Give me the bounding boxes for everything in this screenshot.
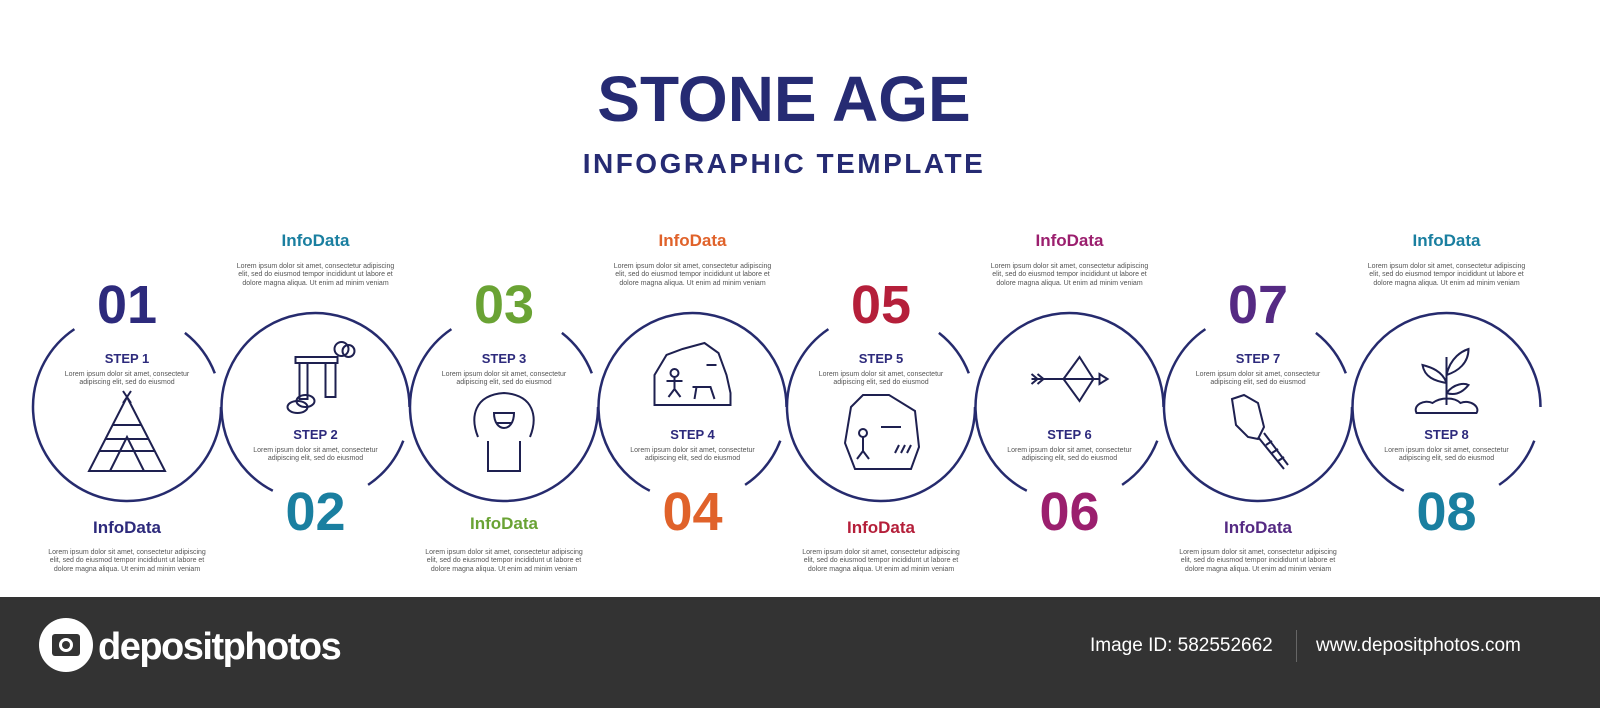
step 4: elit, sed do eiusmod tempor incididunt ut labore et — [615, 271, 770, 278]
icon: stonehenge — [288, 342, 354, 413]
step 7 — [1164, 275, 1352, 573]
step 8: STEP 8 — [1424, 427, 1469, 442]
step 1: 01 — [97, 275, 157, 335]
step 4 — [598, 231, 786, 542]
step 1: elit, sed do eiusmod tempor incididunt ut labore et — [50, 557, 204, 564]
step 2: InfoData — [282, 231, 350, 250]
step 1: dolore magna aliqua. Ut enim ad minim veniam — [54, 566, 200, 573]
step 4: adipiscing elit, sed do eiusmod — [645, 455, 740, 462]
step 3: elit, sed do eiusmod tempor incididunt ut labore et — [427, 557, 581, 564]
step 7: elit, sed do eiusmod tempor incididunt ut labore et — [1181, 557, 1335, 564]
icon: stone club — [1232, 395, 1288, 469]
step 1: Lorem ipsum dolor sit amet, consectetur — [65, 371, 190, 378]
step 7: InfoData — [1224, 518, 1293, 537]
step 1: STEP 1 — [105, 351, 149, 366]
step 7: STEP 7 — [1236, 351, 1280, 366]
step 8: Lorem ipsum dolor sit amet, consectetur adipiscing — [1368, 263, 1525, 270]
title: STONE AGE — [597, 63, 971, 135]
step 3: Lorem ipsum dolor sit amet, consectetur adipiscing — [425, 549, 583, 556]
subtitle: INFOGRAPHIC TEMPLATE — [583, 148, 985, 179]
step 6: elit, sed do eiusmod tempor incididunt ut labore et — [992, 271, 1147, 278]
step 6: 06 — [1039, 482, 1100, 542]
step 6: Lorem ipsum dolor sit amet, consectetur — [1007, 447, 1132, 454]
icon: caveman — [474, 393, 534, 471]
step 3: adipiscing elit, sed do eiusmod — [456, 379, 552, 386]
step 2: Lorem ipsum dolor sit amet, consectetur — [253, 447, 378, 454]
step 6 — [976, 231, 1164, 542]
step 8: 08 — [1416, 482, 1477, 542]
step 5: elit, sed do eiusmod tempor incididunt ut labore et — [804, 557, 958, 564]
step 4: dolore magna aliqua. Ut enim ad minim veniam — [619, 280, 766, 287]
step 1: adipiscing elit, sed do eiusmod — [79, 379, 175, 386]
footer bar — [0, 597, 1600, 708]
step 5: InfoData — [847, 518, 916, 537]
step 4: Lorem ipsum dolor sit amet, consectetur — [630, 447, 755, 454]
footer url: www.depositphotos.com — [1315, 635, 1521, 656]
step 1: Lorem ipsum dolor sit amet, consectetur adipiscing — [48, 549, 206, 556]
step 2: adipiscing elit, sed do eiusmod — [268, 455, 363, 462]
icon: painted rock — [845, 395, 919, 469]
step 3: InfoData — [470, 514, 539, 533]
step 4: 04 — [662, 482, 723, 542]
step 8: elit, sed do eiusmod tempor incididunt ut labore et — [1369, 271, 1524, 278]
step 1 — [33, 275, 221, 573]
icon: cave painting — [654, 343, 730, 405]
step 2: STEP 2 — [293, 427, 338, 442]
step 3: dolore magna aliqua. Ut enim ad minim veniam — [431, 566, 577, 573]
step 7: 07 — [1228, 275, 1288, 335]
icon: teepee — [89, 391, 165, 471]
icon: camera logo — [39, 618, 93, 672]
step 7: Lorem ipsum dolor sit amet, consectetur adipiscing — [1179, 549, 1337, 556]
step 6: dolore magna aliqua. Ut enim ad minim veniam — [996, 280, 1143, 287]
step 5: STEP 5 — [859, 351, 903, 366]
step 5: dolore magna aliqua. Ut enim ad minim veniam — [808, 566, 954, 573]
step 3: 03 — [474, 275, 534, 335]
step 6: STEP 6 — [1047, 427, 1092, 442]
step 2: 02 — [285, 482, 346, 542]
step 7: dolore magna aliqua. Ut enim ad minim veniam — [1185, 566, 1331, 573]
footer image id: Image ID: 582552662 — [1090, 635, 1273, 656]
step 5: adipiscing elit, sed do eiusmod — [833, 379, 929, 386]
step 7: Lorem ipsum dolor sit amet, consectetur — [1196, 371, 1321, 378]
step 5 — [787, 275, 975, 573]
step 3 — [410, 275, 598, 573]
step 8: adipiscing elit, sed do eiusmod — [1399, 455, 1494, 462]
icon: bow and arrow — [1032, 357, 1108, 401]
step 2: dolore magna aliqua. Ut enim ad minim veniam — [242, 280, 389, 287]
step 8: dolore magna aliqua. Ut enim ad minim veniam — [1373, 280, 1520, 287]
step 8: Lorem ipsum dolor sit amet, consectetur — [1384, 447, 1509, 454]
step 4: InfoData — [658, 231, 727, 250]
step 8 — [1352, 231, 1540, 542]
step 5: Lorem ipsum dolor sit amet, consectetur — [819, 371, 944, 378]
step 2 — [222, 231, 410, 542]
step 6: adipiscing elit, sed do eiusmod — [1022, 455, 1117, 462]
step 6: InfoData — [1036, 231, 1104, 250]
step 5: Lorem ipsum dolor sit amet, consectetur adipiscing — [802, 549, 960, 556]
step 4: Lorem ipsum dolor sit amet, consectetur adipiscing — [614, 263, 771, 270]
step 4: STEP 4 — [670, 427, 716, 442]
icon: sprout — [1416, 349, 1477, 413]
step 5: 05 — [851, 275, 911, 335]
step 2: elit, sed do eiusmod tempor incididunt ut labore et — [238, 271, 393, 278]
step 6: Lorem ipsum dolor sit amet, consectetur adipiscing — [991, 263, 1148, 270]
step 1: InfoData — [93, 518, 162, 537]
step 8: InfoData — [1412, 231, 1481, 250]
step 3: STEP 3 — [482, 351, 526, 366]
step 2: Lorem ipsum dolor sit amet, consectetur adipiscing — [237, 263, 394, 270]
footer brand: depositphotos — [98, 626, 341, 668]
step 3: Lorem ipsum dolor sit amet, consectetur — [442, 371, 567, 378]
step 7: adipiscing elit, sed do eiusmod — [1210, 379, 1306, 386]
